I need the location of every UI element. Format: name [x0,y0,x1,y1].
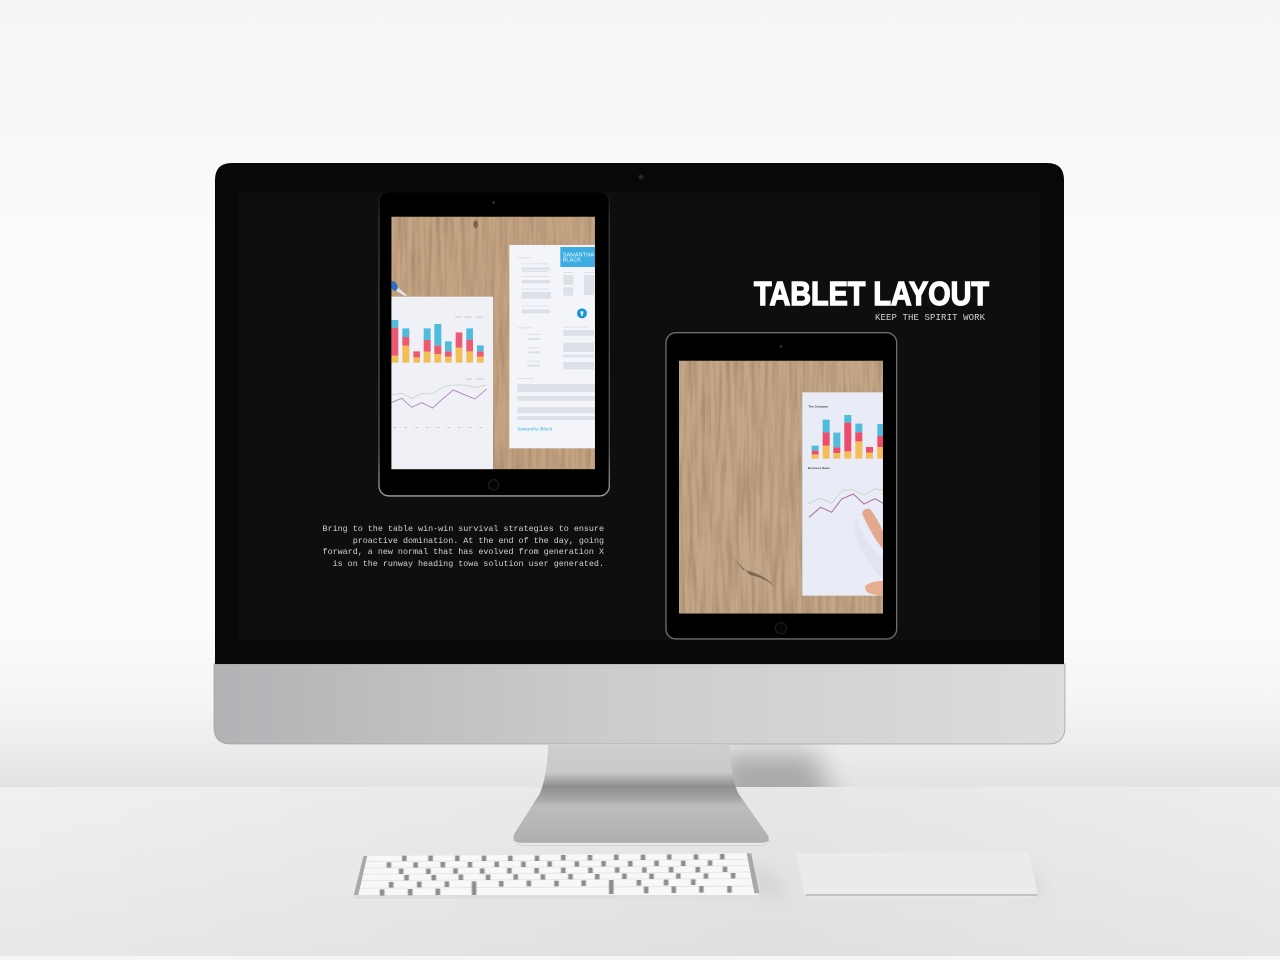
bars blue [812,415,883,451]
monitor screen [238,192,1040,640]
tablet body [379,192,609,496]
resume name: BLACK [563,258,581,264]
desk bottom edge [0,956,1280,960]
pen tip [391,281,398,291]
trackpad and keyboard shadows [757,862,1046,895]
title: TABLET LAYOUT [754,275,989,312]
chart paper [391,297,493,469]
trackpad [796,852,1037,899]
legend marks [393,317,483,428]
bars red [391,328,484,357]
desk shading [0,787,1280,960]
resume paper [509,245,595,448]
bars yellow [391,346,484,363]
line chart series [391,385,487,398]
trackpad top [796,852,1037,895]
bars red [812,423,883,454]
trackpad front edge [806,894,1037,896]
chart paper [802,392,883,597]
body text: proactive domination. At the end of the day, going [353,536,604,546]
tablet camera [492,201,495,204]
tablet right [666,333,897,639]
bars blue [391,320,484,351]
tablet screen photo [389,217,595,469]
key gaps [380,854,735,896]
finger shadow [853,518,883,578]
keyboard front rim [354,895,759,899]
body text: is on the runway heading towa solution user generated. [333,559,604,569]
monitor chin [214,664,1065,744]
line chart series [808,489,883,503]
stand body [513,745,769,843]
subtitle: KEEP THE SPIRIT WORK [875,313,986,323]
resume text columns [517,257,595,420]
tablet camera [780,345,782,348]
monitor stand [513,745,770,845]
tablet home button [775,623,787,634]
wood grain [679,361,883,614]
thumb [865,581,883,597]
key row lines [355,859,757,888]
monitor [214,163,1065,744]
paper sheet [802,392,883,596]
tablet screen photo [679,361,883,614]
bars yellow [812,441,883,459]
webcam [638,174,644,180]
desk surface [0,787,1280,960]
chart title: The Company [808,404,828,408]
body text: Bring to the table win-win survival strategies to ensure [323,524,604,534]
wood grain [391,217,595,469]
wood background [391,217,595,469]
resume sheet [509,245,595,448]
keyboard body [354,853,759,899]
stand base rim [514,840,770,845]
wood background [679,361,883,614]
tablet left [379,192,609,496]
line chart title: Business News [808,466,830,470]
resume icon figure [581,311,583,316]
monitor shadow on wall [718,744,842,787]
keyboard edges [354,853,759,896]
wood knots [732,557,777,588]
trackpad front rim [808,896,1035,899]
paper sheet [391,297,493,469]
body text: forward, a new normal that has evolved from generation X [323,547,604,557]
resume signature: Samantha Black [517,427,553,433]
resume header [560,247,595,267]
index finger [862,509,883,549]
monitor bezel [215,163,1064,664]
tablet home button [488,480,499,490]
resume profile icon [577,308,587,318]
tablet body [666,333,897,639]
keyboard [354,853,759,899]
resume name: SAMANTHA [563,252,594,258]
pen cap [396,287,408,296]
wood knot [473,220,478,228]
